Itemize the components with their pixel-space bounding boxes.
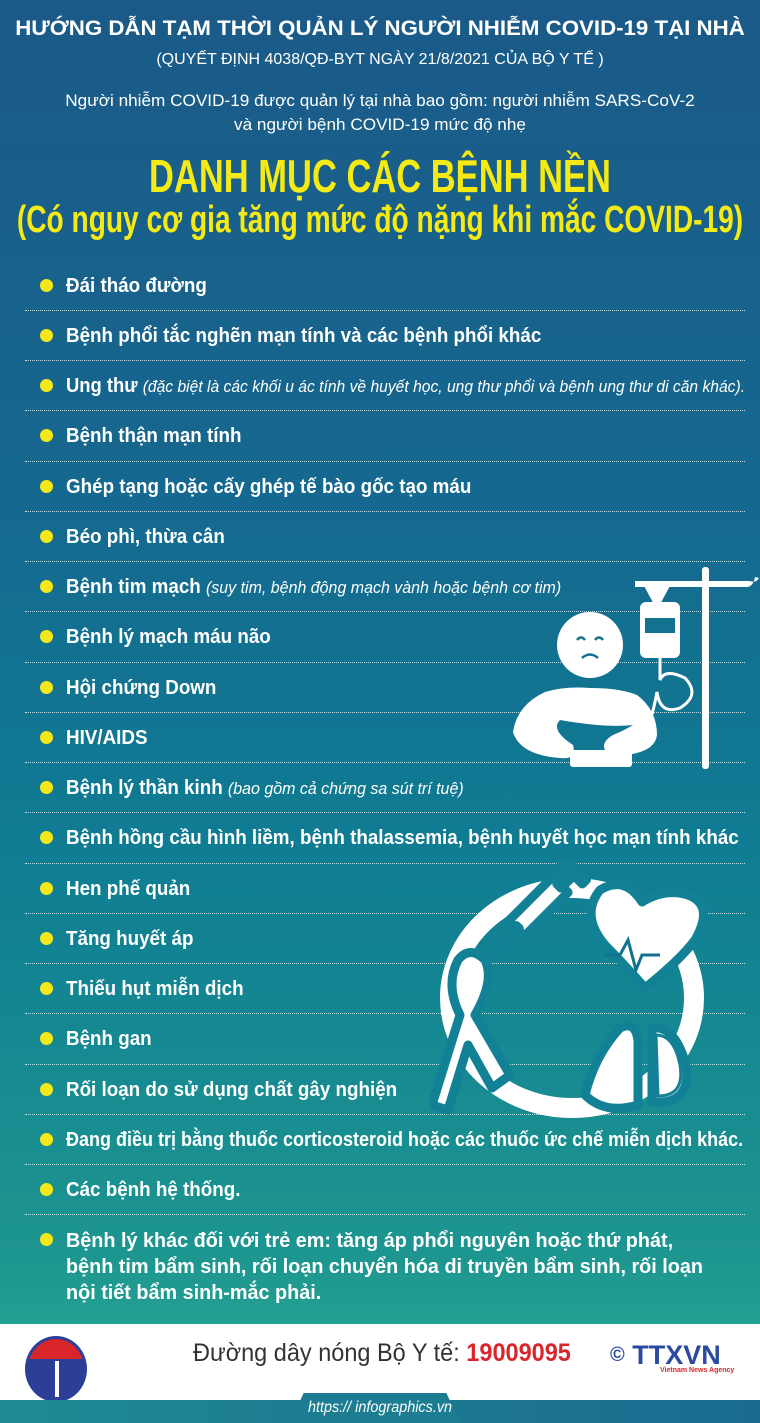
item 12: Bệnh hồng cầu hình liềm, bệnh thalassemia, bệnh huyết học mạn tính khác: [66, 827, 739, 849]
hotline: Đường dây nóng Bộ Y tế: 19009095: [193, 1339, 571, 1367]
item 20: bệnh tim bẩm sinh, rối loạn chuyển hóa di truyền bẩm sinh, rối loạn: [66, 1256, 703, 1278]
item 9: Hội chứng Down: [66, 677, 216, 699]
item 6: Béo phì, thừa cân: [66, 526, 225, 548]
item 10: HIV/AIDS: [66, 727, 147, 749]
text: https:// infographics.vn: [308, 1399, 452, 1416]
item 18: Đang điều trị bằng thuốc corticosteroid hoặc các thuốc ức chế miễn dịch khác.: [66, 1129, 743, 1151]
item 15: Thiếu hụt miễn dịch: [66, 978, 244, 1000]
item 2: Bệnh phổi tắc nghẽn mạn tính và các bệnh phổi khác: [66, 325, 541, 347]
item 20: [40, 1230, 703, 1304]
footer: [0, 1324, 760, 1423]
item 8: Bệnh lý mạch máu não: [66, 626, 271, 648]
item 3: Ung thư (đặc biệt là các khối u ác tính về huyết học, ung thư phổi và bệnh ung thư di căn khác).: [66, 375, 745, 397]
sub heading: (Có nguy cơ gia tăng mức độ nặng khi mắc COVID-19): [17, 199, 743, 241]
item 5: Ghép tạng hoặc cấy ghép tế bào gốc tạo máu: [66, 476, 471, 498]
list: conditions: nội tiết bẩm sinh-mắc phải.: [66, 1282, 321, 1304]
bottom bar with url: [0, 1400, 760, 1423]
item 16: Bệnh gan: [66, 1028, 152, 1050]
item 17: Rối loạn do sử dụng chất gây nghiện: [66, 1079, 397, 1101]
icon: health circle (syringe, heart, ribbon, lungs): [430, 863, 707, 1118]
decision subtitle: (QUYẾT ĐỊNH 4038/QĐ-BYT NGÀY 21/8/2021 CỦA BỘ Y TẾ ): [156, 51, 604, 68]
item 4: Bệnh thận mạn tính: [66, 425, 241, 447]
main heading: DANH MỤC CÁC BỆNH NỀN: [149, 150, 611, 202]
dividers: [25, 310, 745, 1215]
item 1: Đái tháo đường: [66, 275, 207, 297]
item 7: Bệnh tim mạch (suy tim, bệnh động mạch vành hoặc bệnh cơ tim): [66, 576, 561, 598]
logo: TTXVN: Vietnam News Agency: [660, 1367, 734, 1374]
intro text: Người nhiễm COVID-19 được quản lý tại nhà bao gồm: người nhiễm SARS-CoV-2: [65, 91, 695, 110]
item 19: Các bệnh hệ thống.: [66, 1179, 240, 1201]
item 20: Bệnh lý khác đối với trẻ em: tăng áp phổi nguyên hoặc thứ phát,: [66, 1230, 673, 1252]
item 14: Tăng huyết áp: [66, 928, 193, 950]
intro text: và người bệnh COVID-19 mức độ nhẹ: [234, 115, 526, 134]
logo: TTXVN: © TTXVN: [610, 1340, 721, 1370]
intro text: [65, 91, 695, 134]
item 11: Bệnh lý thần kinh (bao gồm cả chứng sa sút trí tuệ): [66, 777, 464, 799]
icon: patient with IV drip: [513, 567, 759, 769]
item 13: Hen phế quản: [66, 878, 190, 900]
header title: HƯỚNG DẪN TẠM THỜI QUẢN LÝ NGƯỜI NHIỄM COVID-19 TẠI NHÀ: [15, 17, 745, 40]
logo: ministry of health: [25, 1336, 87, 1402]
